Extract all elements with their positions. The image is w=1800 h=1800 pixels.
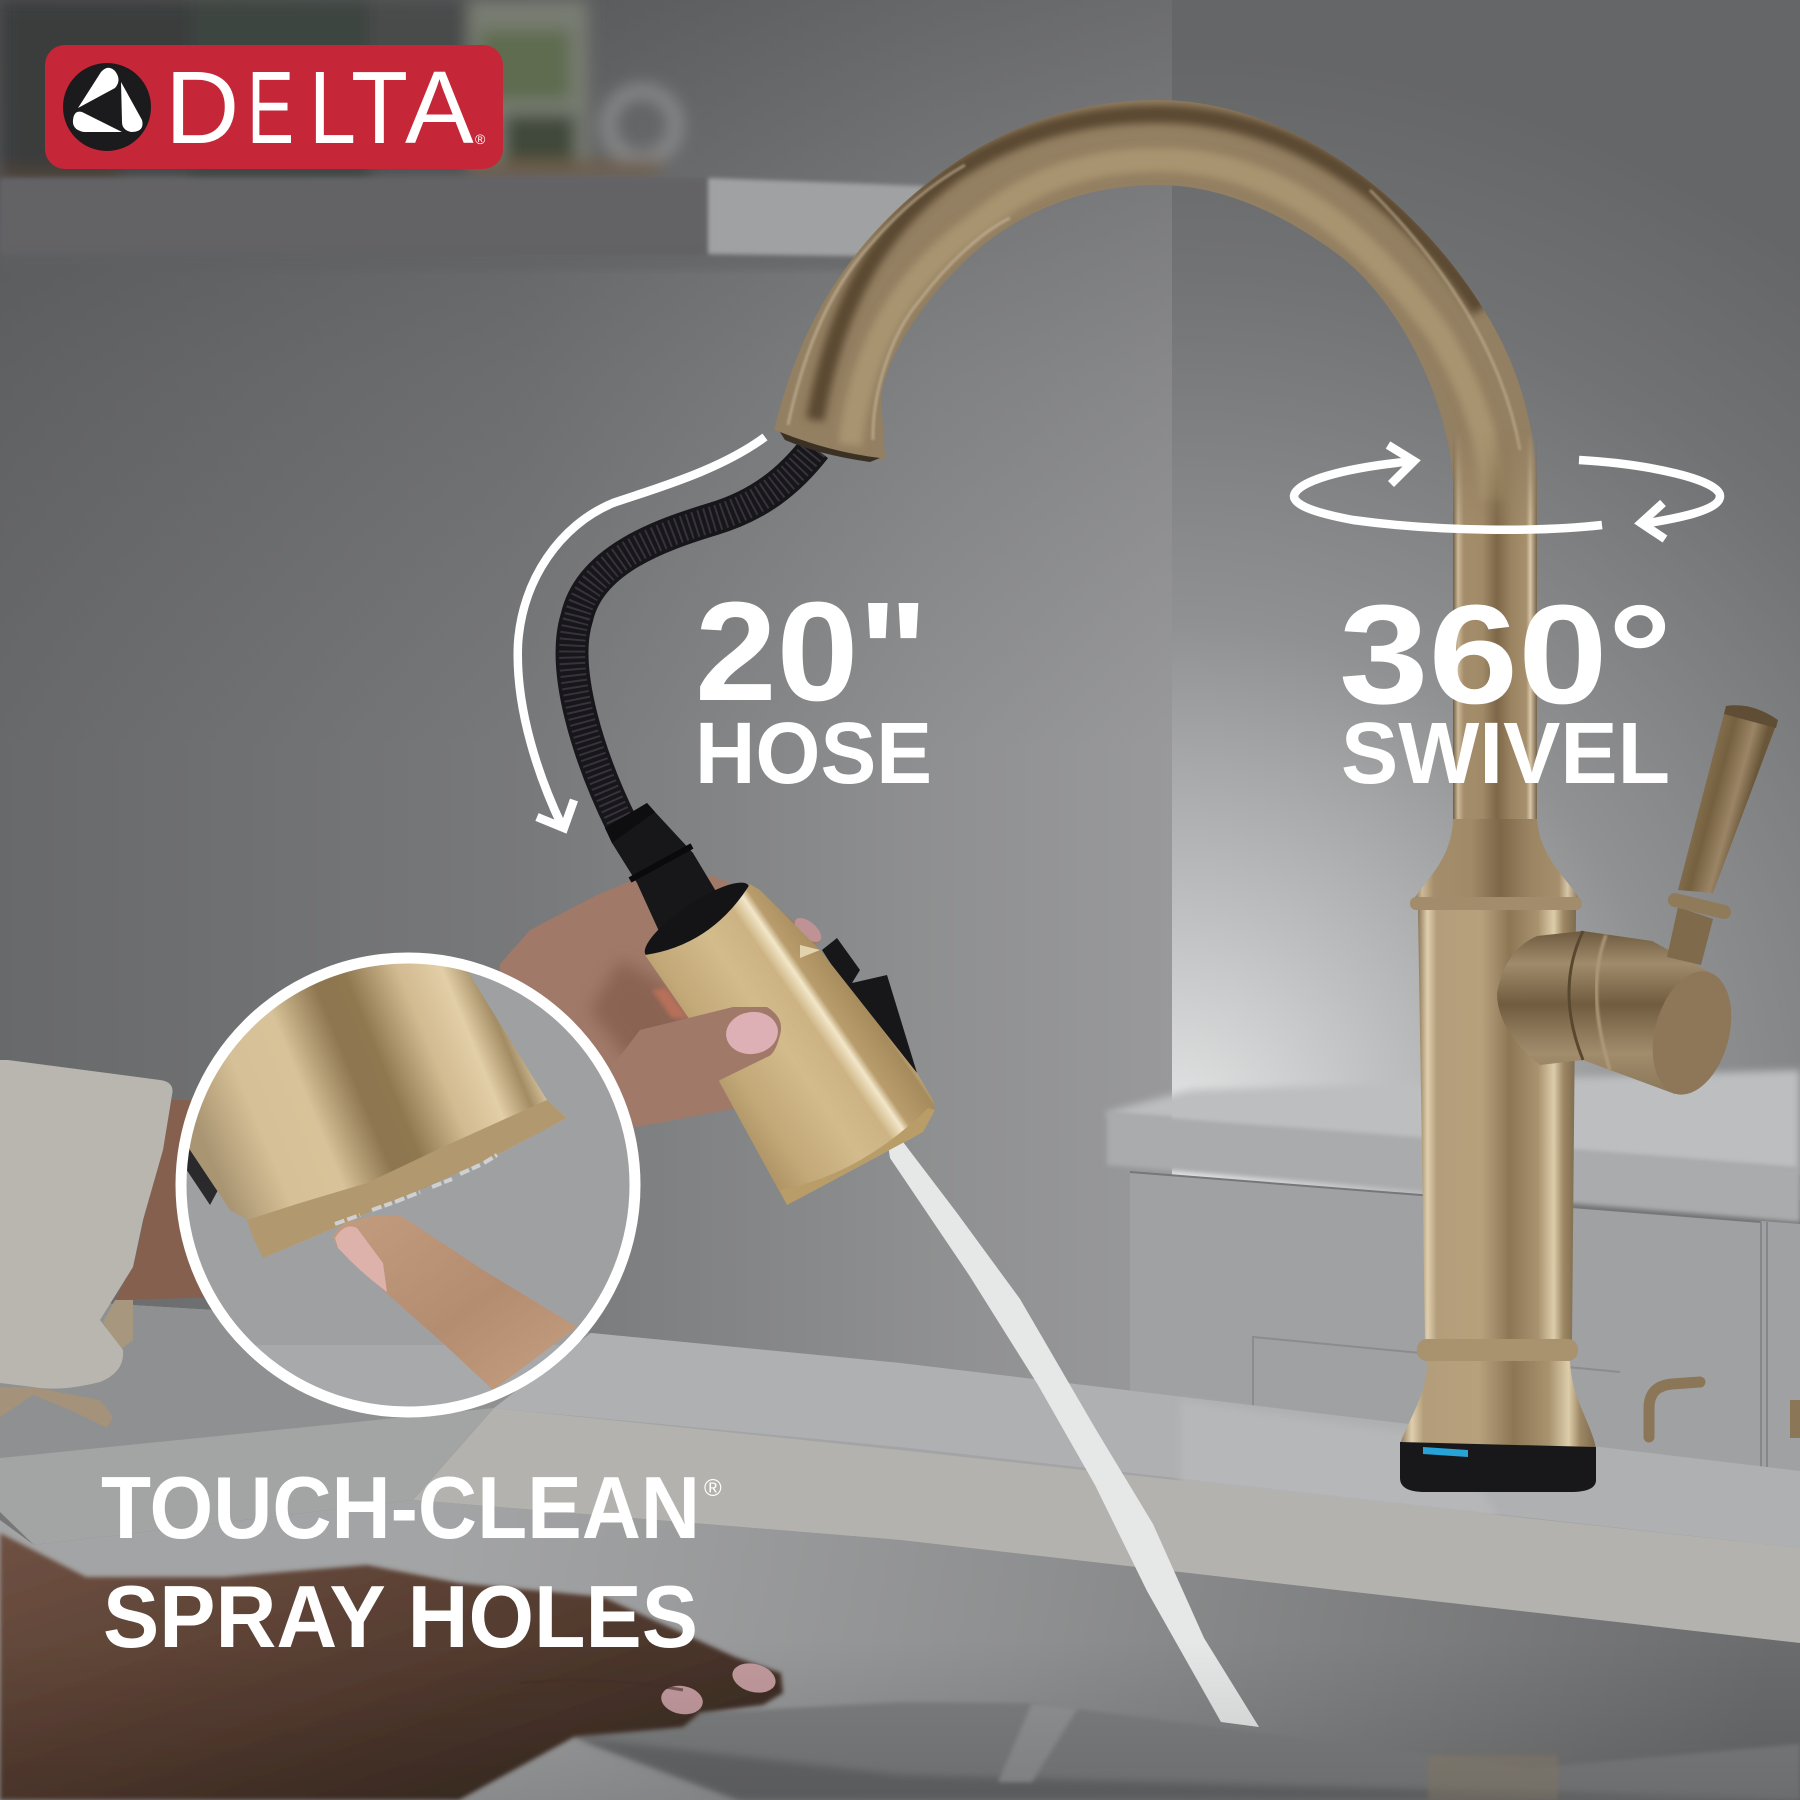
background: bright right wall	[1172, 0, 1800, 1200]
lower vignette	[0, 1640, 1800, 1800]
logo registered mark: ®	[475, 131, 486, 147]
background: kitchen wall left	[0, 0, 1172, 1500]
main countertop surface	[0, 1297, 1800, 1560]
logo wordmark: E	[247, 50, 294, 165]
text: spray holes: SPRAY HOLES	[103, 1567, 698, 1666]
arrow: 20 inch hose	[518, 437, 765, 828]
spout arch	[774, 100, 1537, 514]
inset: dark button sliver	[187, 1148, 218, 1205]
logo wordmark: L	[309, 50, 356, 165]
sink front lip speckled edge	[413, 1408, 1800, 1643]
thumb with nail	[590, 1007, 781, 1127]
front counter surface	[574, 1702, 1800, 1800]
logo wordmark: D	[165, 50, 239, 165]
hand holding sprayer	[500, 875, 825, 1127]
water stream	[885, 1125, 1259, 1727]
text: 360 degrees: 360°	[1339, 575, 1672, 733]
text: 20 inch: 20"	[695, 572, 928, 730]
hand on sink	[0, 1533, 783, 1800]
text: swivel: SWIVEL	[1341, 705, 1670, 802]
arrow: swivel right arc	[1579, 460, 1720, 539]
faucet body	[1400, 819, 1596, 1448]
background: blurred shelf objects	[0, 0, 676, 180]
sprayer head	[636, 871, 935, 1205]
inset circle: touch-clean spray holes	[176, 952, 640, 1418]
text: hose: HOSE	[695, 705, 932, 802]
text: touch-clean: TOUCH-CLEAN	[101, 1458, 700, 1557]
sleeve and forearm	[0, 1060, 230, 1428]
inset: finger	[333, 1215, 577, 1390]
hose	[572, 448, 815, 825]
arrow: swivel left arc	[1294, 445, 1602, 530]
logo wordmark	[165, 50, 474, 165]
touch base black ring with LED	[1400, 1442, 1596, 1492]
handle lever	[1667, 705, 1778, 965]
inset: spray holes	[335, 1155, 497, 1224]
logo wordmark: A	[405, 50, 474, 165]
spout nozzle opening	[780, 432, 880, 462]
black sprayer buttons	[822, 938, 917, 1073]
hose connector	[605, 803, 722, 940]
logo icon: circle with triangle petals	[63, 63, 151, 151]
shelf	[0, 178, 925, 270]
text: registered mark: ®	[704, 1475, 722, 1502]
logo wordmark: T	[351, 50, 408, 165]
inset: sprayer close-up	[190, 964, 567, 1258]
sink left lip	[0, 1408, 494, 1545]
inset: sprayer rim	[247, 1100, 567, 1258]
inset: fingernail	[335, 1226, 387, 1292]
back cabinet counter and doors	[1107, 1070, 1800, 1480]
sink basin interior	[0, 1500, 1800, 1800]
spout vertical metal shading	[1453, 430, 1537, 820]
handle hub	[1497, 931, 1744, 1103]
logo: Delta badge	[45, 45, 503, 169]
